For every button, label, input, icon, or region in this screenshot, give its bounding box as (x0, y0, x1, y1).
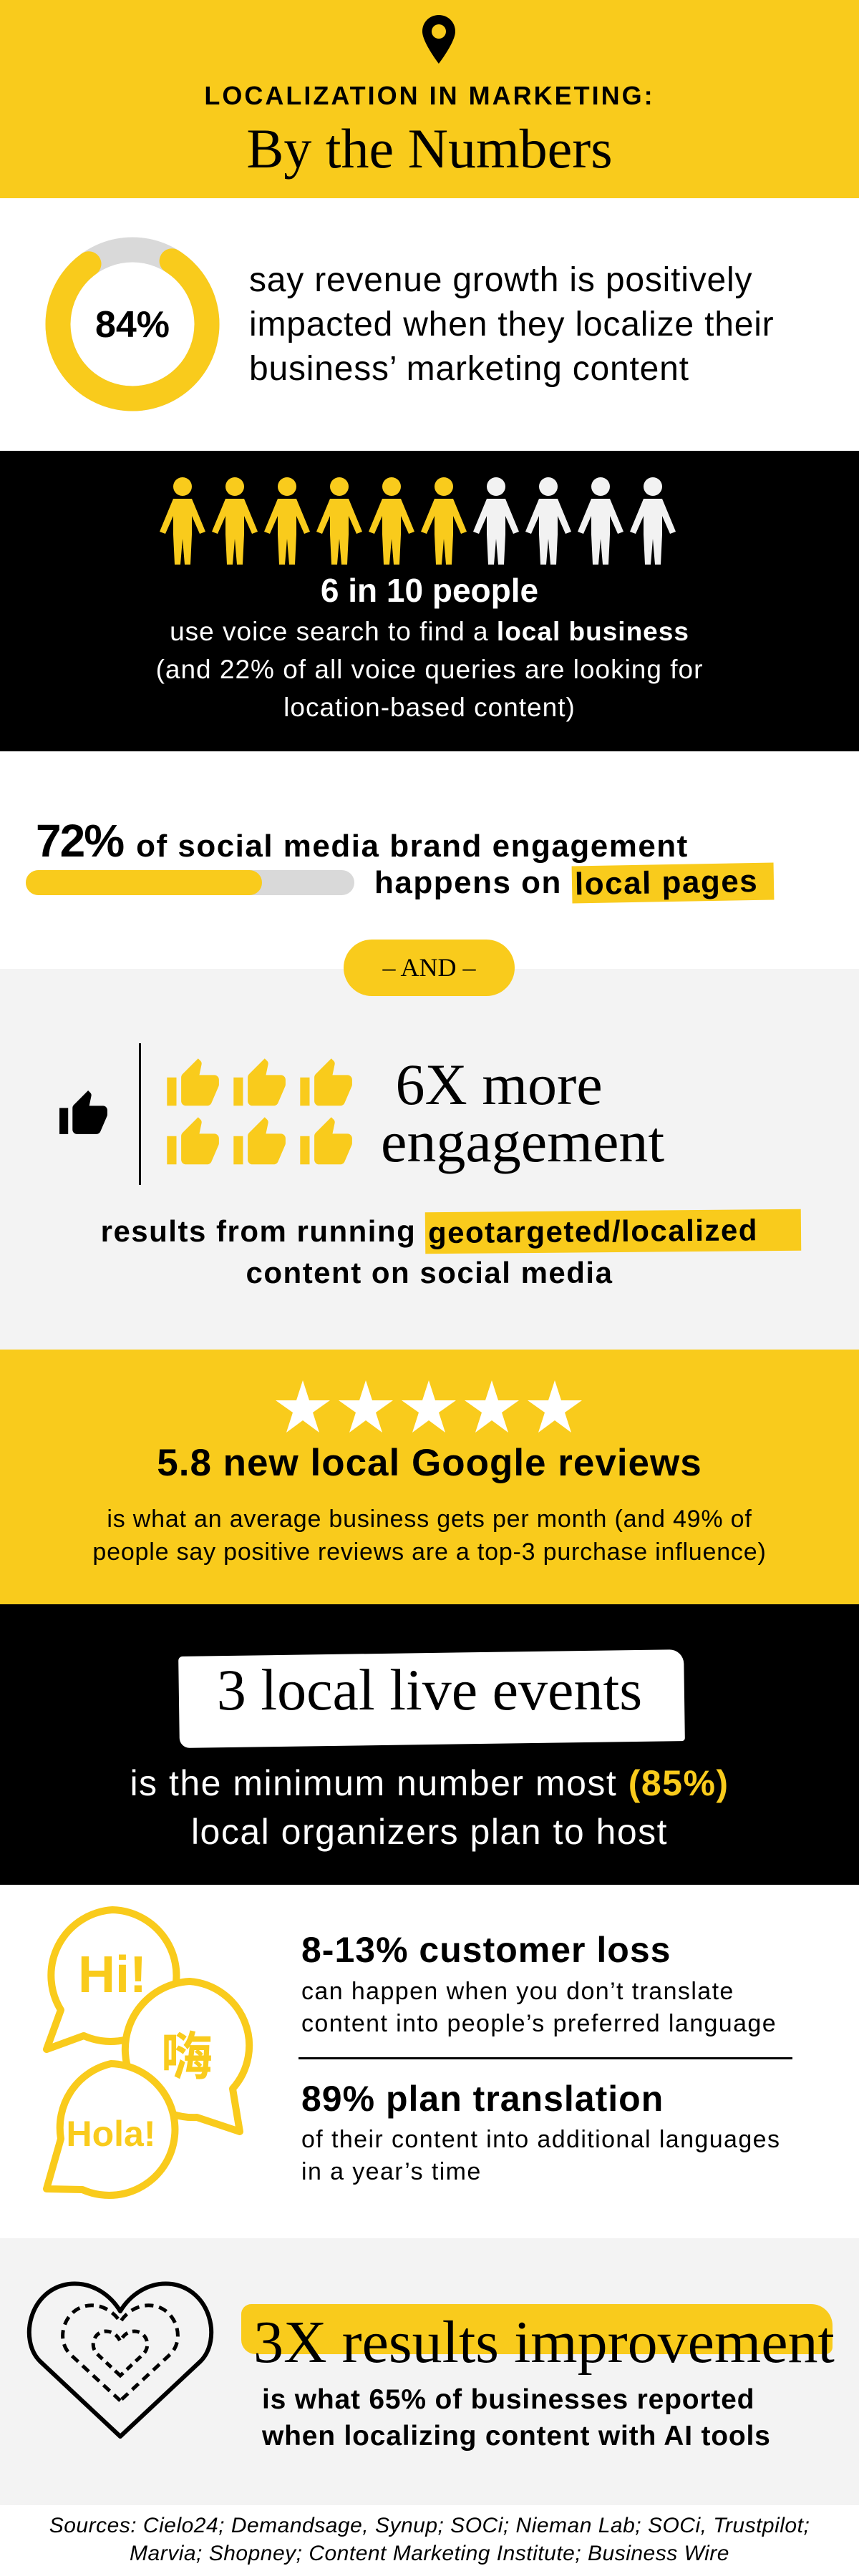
heading: customer loss: 8-13% customer loss (301, 1930, 671, 1970)
divider (299, 2057, 792, 2059)
text: happens on local pages (374, 863, 775, 903)
panel: header (0, 0, 859, 198)
heading: 6X more engagement: 6X more (395, 1052, 603, 1117)
heading: plan translation: 89% plan translation (301, 2079, 664, 2119)
text: revenue stat: say revenue growth is positively (249, 261, 752, 299)
text: AI body: when localizing content with AI tools (262, 2421, 771, 2451)
text: sources: Marvia; Shopney; Content Marketing Institute; Business Wire (130, 2542, 729, 2565)
text: results from running: content on social media (246, 1256, 613, 1289)
text: revenue stat (249, 261, 774, 388)
text: AI body (262, 2384, 771, 2451)
icon: speech bubbles: Hola! (66, 2114, 156, 2154)
chart: donut 84%: 84% (95, 304, 170, 346)
panel: google reviews (0, 1350, 859, 1604)
title: By the Numbers (246, 117, 613, 180)
text: events body: local organizers plan to host (191, 1812, 668, 1852)
text: translation body (301, 2126, 780, 2185)
text: customer loss body: content into people’s preferred language (301, 2010, 777, 2037)
text: sources (49, 2514, 810, 2565)
heading: 6X more engagement: engagement (381, 1109, 664, 1174)
text: results from running: results from running (101, 1214, 416, 1248)
panel: live events (0, 1604, 859, 1885)
icon: location pin (422, 15, 455, 64)
text: events body: is the minimum number most (85%) (130, 1763, 729, 1803)
icon: yellow thumbs grid (167, 1058, 352, 1165)
icon: speech bubbles: 嗨 (161, 2014, 213, 2089)
text: events body (130, 1763, 729, 1852)
text: happens on local pages: happens on (374, 865, 562, 900)
text: happens on local pages: local pages (574, 864, 758, 902)
text: AI body: is what 65% of businesses reported (262, 2384, 754, 2415)
text: results from running (101, 1209, 802, 1289)
text: revenue stat: business’ marketing content (249, 350, 689, 388)
highlight: 3X (241, 2304, 833, 2354)
text: voice search body: location-based content) (283, 693, 576, 722)
icon: black thumb (59, 1091, 107, 1134)
chart: progress bar 72% (26, 870, 354, 895)
heading: 3X results improvement: 3X results improvement (253, 2309, 835, 2376)
title: subtitle: LOCALIZATION IN MARKETING: (204, 81, 655, 110)
text: 72% stat: 72% of social media brand engagement (36, 815, 689, 867)
panel: revenue growth (0, 198, 859, 451)
panel: AI results (0, 2238, 859, 2505)
text: sources: Sources: Cielo24; Demandsage, Synup; SOCi; Nieman Lab; SOCi, Trustpilot; (49, 2514, 810, 2537)
text: customer loss body (301, 1978, 777, 2037)
divider line (139, 1043, 141, 1185)
heading: 6 in 10 people: 6 in 10 people (321, 572, 538, 609)
heading: 3 local live events: 3 local live events (217, 1657, 642, 1722)
text: reviews body: people say positive reviews are a top-3 purchase influence) (92, 1538, 767, 1566)
icon: heart (27, 2281, 213, 2439)
heading: 6X more engagement (381, 1052, 664, 1174)
panel: social engagement (0, 751, 859, 969)
text: translation body: in a year’s time (301, 2158, 482, 2185)
panel: translation (0, 1885, 859, 2238)
text: reviews body: is what an average business gets per month (and 49% of (107, 1506, 752, 1533)
text: voice search body (156, 617, 703, 722)
chart: donut 84% (45, 238, 219, 411)
text: reviews body (92, 1506, 767, 1566)
text: translation body: of their content into additional languages (301, 2126, 780, 2153)
panel: voice search (0, 451, 859, 751)
highlight: white brush (178, 1649, 685, 1748)
text: revenue stat: impacted when they localize their (249, 306, 774, 343)
text: voice search body: use voice search to find a local business (170, 617, 689, 646)
panel: 6x engagement (0, 969, 859, 1350)
text: customer loss body: can happen when you don’t translate (301, 1978, 734, 2005)
icon: five stars (276, 1380, 582, 1433)
text: voice search body: (and 22% of all voice queries are looking for (156, 655, 703, 684)
heading: 5.8 reviews: 5.8 new local Google reviews (157, 1442, 702, 1484)
icon: people 6 of 10 (160, 477, 676, 565)
icon: speech bubbles (43, 1906, 253, 2199)
callout: AND pill (344, 940, 515, 996)
callout: AND pill: – AND – (382, 953, 475, 982)
icon: speech bubbles: Hi! (78, 1946, 147, 2004)
text: results from running: geotargeted/localized (428, 1213, 759, 1249)
